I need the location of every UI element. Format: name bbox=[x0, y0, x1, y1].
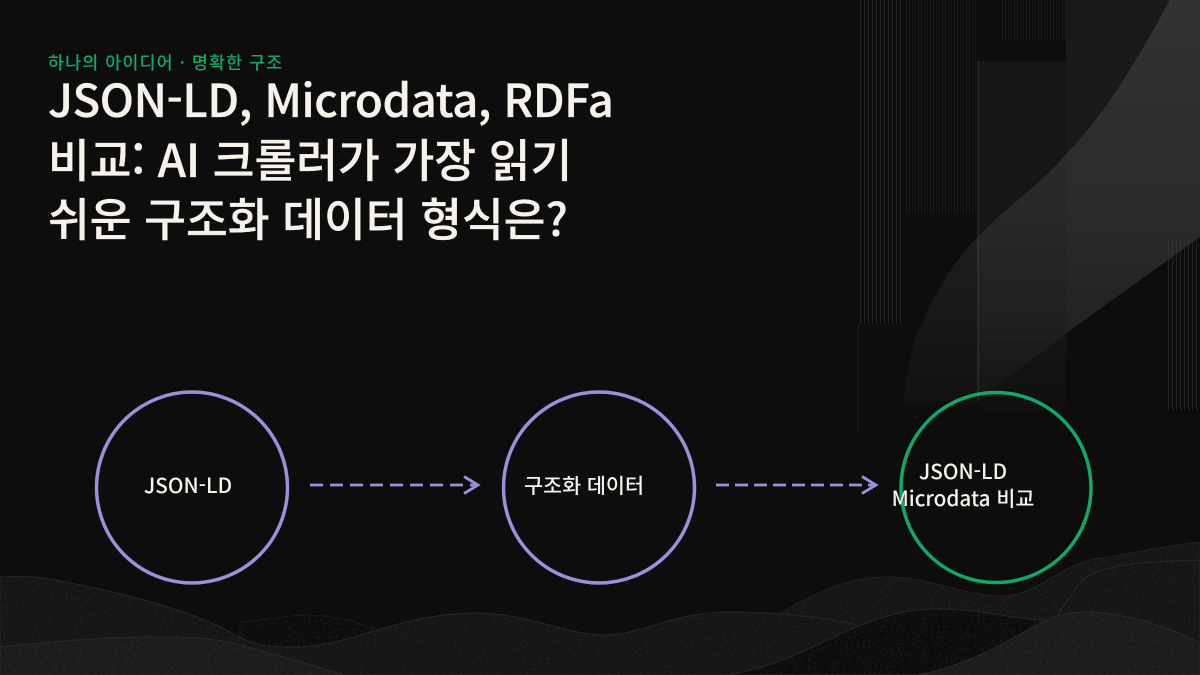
label: structured data: 구조화 데이터 bbox=[524, 469, 644, 499]
arrow: structured data to comparison bbox=[716, 476, 876, 494]
title: 쉬운 구조화 데이터 형식은? bbox=[48, 184, 568, 250]
label: JSON-LD: JSON-LD bbox=[144, 469, 232, 499]
title bbox=[48, 65, 613, 250]
hills bbox=[0, 542, 1200, 675]
arrow: JSON-LD to structured data bbox=[310, 476, 478, 494]
label: JSON-LD Microdata comparison: JSON-LD bbox=[919, 455, 1007, 485]
label: JSON-LD Microdata comparison bbox=[892, 455, 1034, 512]
eyebrow text: 하나의 아이디어 · 명확한 구조 bbox=[48, 50, 283, 75]
title: 비교: AI 크롤러가 가장 읽기 bbox=[48, 124, 572, 190]
circle: comparison bbox=[901, 392, 1091, 582]
label: JSON-LD Microdata comparison: Microdata 비교 bbox=[892, 482, 1034, 512]
circle: structured data bbox=[504, 392, 694, 583]
title: JSON-LD, Microdata, RDFa bbox=[48, 65, 613, 131]
circle: JSON-LD bbox=[96, 392, 288, 583]
